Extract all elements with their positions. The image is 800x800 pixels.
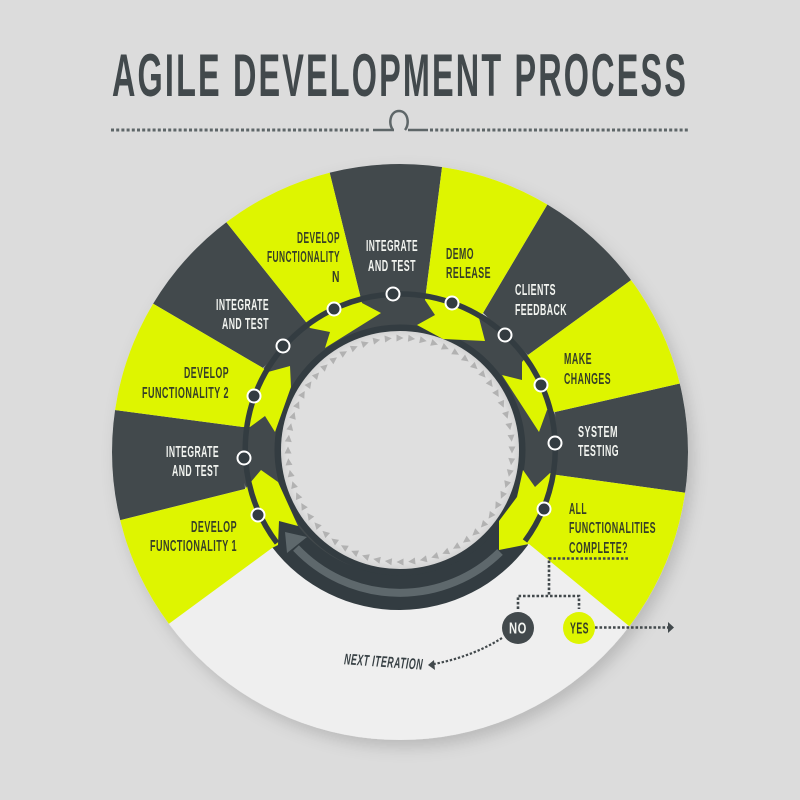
label: develop functionality N: FUNCTIONALITY — [267, 249, 340, 266]
label: integrate and test left: AND TEST — [172, 463, 219, 480]
label: all functionalities complete: COMPLETE? — [569, 540, 628, 557]
process disc — [100, 152, 702, 740]
label: integrate and test upper left: AND TEST — [222, 316, 269, 333]
label: integrate and test left — [166, 444, 219, 480]
decision connector — [518, 558, 628, 609]
arrow: yes exit — [595, 622, 674, 633]
icon: return arrow — [285, 532, 500, 593]
label: develop functionality 2: DEVELOP — [184, 365, 229, 382]
title divider with loop icon — [111, 111, 689, 130]
label: develop functionality N: DEVELOP — [297, 230, 340, 247]
label: next iteration: NEXT ITERATION — [344, 651, 424, 674]
label: all functionalities complete: ALL — [569, 501, 587, 518]
label: all functionalities complete: FUNCTIONALITIES — [569, 520, 656, 537]
label: system testing: TESTING — [578, 443, 619, 460]
label: clients feedback — [515, 282, 567, 319]
label: develop functionality N — [267, 230, 340, 286]
label: develop functionality 2: FUNCTIONALITY 2 — [142, 385, 229, 402]
tick triangles — [282, 332, 518, 568]
centre circle — [281, 331, 519, 569]
label: all functionalities complete — [569, 501, 656, 557]
yes node: YES — [570, 620, 589, 638]
label: make changes — [564, 351, 611, 388]
label: make changes: CHANGES — [564, 371, 611, 388]
segment: develop functionality 2 — [115, 304, 291, 432]
label: integrate and test upper left — [216, 297, 269, 333]
label: develop functionality 2 — [142, 365, 229, 402]
segment: develop functionality N — [226, 172, 381, 348]
no node — [502, 612, 534, 644]
label: system testing — [578, 424, 619, 460]
segment: all functionalities complete — [499, 470, 686, 626]
label: demo release: DEMO — [446, 246, 474, 263]
label: develop functionality N: N — [332, 269, 340, 286]
no node: NO — [509, 620, 527, 638]
step dots — [238, 288, 562, 522]
inner ring — [278, 328, 522, 572]
label: develop functionality 1: DEVELOP — [191, 519, 237, 536]
label: clients feedback: FEEDBACK — [515, 302, 567, 319]
label: system testing: SYSTEM — [578, 424, 618, 441]
label: clients feedback: CLIENTS — [515, 282, 556, 299]
dark segments — [100, 152, 702, 524]
label: integrate and test top: AND TEST — [368, 258, 416, 275]
return band — [272, 521, 528, 610]
ring base — [241, 291, 559, 609]
label: develop functionality 1: FUNCTIONALITY 1 — [150, 538, 237, 555]
outer thin ring — [245, 294, 555, 543]
label: integrate and test upper left: INTEGRATE — [216, 297, 269, 314]
arrow: next iteration — [428, 638, 502, 670]
label: integrate and test top: INTEGRATE — [366, 238, 418, 255]
label: demo release: RELEASE — [446, 265, 491, 282]
lime segments with arrows — [100, 152, 702, 635]
segment: demo release — [417, 167, 548, 341]
disc background: white sector — [112, 164, 688, 740]
label: make changes: MAKE — [564, 351, 592, 368]
label: integrate and test top — [366, 238, 418, 275]
label: demo release — [446, 246, 491, 282]
segment: make changes — [502, 280, 680, 432]
label: develop functionality 1 — [150, 519, 237, 555]
yes node — [563, 612, 595, 644]
label: integrate and test left: INTEGRATE — [166, 444, 219, 461]
segment: develop functionality 1 — [120, 470, 298, 624]
